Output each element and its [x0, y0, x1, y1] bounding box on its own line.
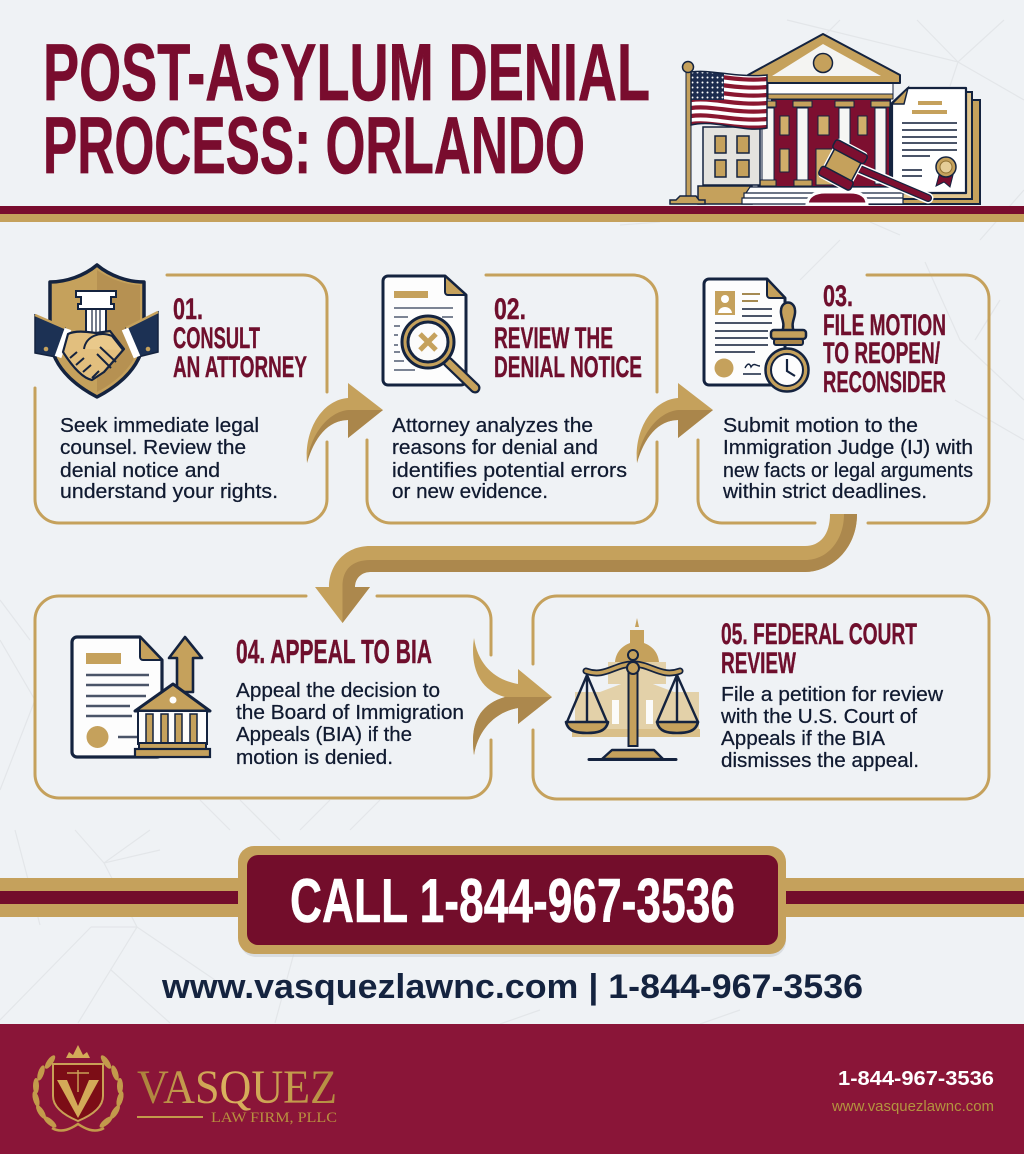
icon: shield and handshake: [35, 265, 158, 397]
icon: flag: [670, 62, 770, 204]
panel: step 05 federal court review: [533, 596, 989, 799]
heading: [721, 618, 917, 680]
heading: 01.: [173, 293, 203, 326]
title: POST-ASYLUM DENIAL: [43, 28, 650, 118]
text block: [60, 415, 278, 503]
text block: understand your rights.: [60, 481, 278, 503]
text block: Appeals (BIA) if the: [236, 724, 412, 746]
heading: 04. APPEAL TO BIA: [236, 634, 432, 671]
icon: scales of justice and capitol: [566, 618, 700, 760]
heading: 03.: [823, 280, 853, 313]
text block: dismisses the appeal.: [721, 750, 919, 772]
footer contact: [831, 1068, 994, 1115]
heading: CONSULT: [173, 322, 260, 355]
footer contact: www.vasquezlawnc.com: [831, 1099, 994, 1115]
text block: [392, 415, 627, 503]
text block: counsel. Review the: [60, 437, 246, 459]
icon: document, arrow and bank: [72, 637, 210, 757]
panel: step 04 appeal to BIA: [35, 596, 491, 798]
icon: document: [860, 88, 980, 204]
text block: [720, 684, 944, 772]
contact line: www.vasquezlawnc.com | 1-844-967-3536: [161, 968, 863, 1006]
text block: or new evidence.: [392, 481, 548, 503]
logo emblem: [31, 1045, 125, 1131]
logo wordmark: LAW FIRM, PLLC: [211, 1110, 337, 1126]
footer contact: 1-844-967-3536: [838, 1068, 994, 1090]
title: PROCESS: ORLANDO: [43, 101, 585, 191]
icon: courthouse, flag, document and gavel: [670, 34, 980, 204]
icon: document, stamp and clock: [704, 279, 808, 392]
panel: step 03 file motion to reopen or reconsider: [698, 275, 989, 523]
arrow: step 1 to step 2: [307, 383, 383, 463]
text block: motion is denied.: [236, 747, 393, 769]
text block: the Board of Immigration: [236, 702, 464, 724]
text block: with the U.S. Court of: [720, 706, 917, 728]
heading: TO REOPEN/: [823, 337, 940, 370]
arrow: step 3 to step 4: [315, 514, 857, 623]
text block: Appeal the decision to: [236, 680, 440, 702]
text block: reasons for denial and: [392, 437, 598, 459]
text block: Seek immediate legal: [60, 415, 259, 437]
heading: AN ATTORNEY: [173, 351, 307, 384]
text block: identifies potential errors: [392, 460, 627, 482]
text block: [722, 415, 973, 503]
icon: gavel: [807, 137, 928, 204]
text block: within strict deadlines.: [722, 481, 927, 503]
logo wordmark: VASQUEZ: [137, 1061, 337, 1114]
panel: step 02 review the denial notice: [367, 275, 657, 523]
text block: Submit motion to the: [723, 415, 918, 437]
header stripes: [0, 206, 1024, 222]
icon: courthouse: [698, 34, 903, 204]
heading: [173, 293, 307, 384]
footer panel: [0, 1024, 1024, 1154]
panel: step 01 consult an attorney: [35, 265, 327, 523]
text block: File a petition for review: [721, 684, 944, 706]
heading: 02.: [494, 293, 526, 326]
arrow: step 4 to step 5: [473, 638, 552, 755]
text block: Immigration Judge (IJ) with: [723, 437, 973, 459]
heading: [494, 293, 642, 384]
title: [43, 28, 650, 191]
heading: DENIAL NOTICE: [494, 351, 642, 384]
text block: denial notice and: [60, 460, 220, 482]
text block: Appeals if the BIA: [721, 728, 886, 750]
icon: document and magnifying glass: [383, 276, 475, 388]
call to action banner: CALL 1-844-967-3536: [290, 867, 735, 936]
heading: REVIEW THE: [494, 322, 613, 355]
arrow: step 2 to step 3: [637, 383, 713, 463]
heading: [823, 280, 946, 399]
heading: RECONSIDER: [823, 366, 946, 399]
heading: 05. FEDERAL COURT: [721, 618, 917, 651]
text block: [236, 680, 464, 769]
heading: FILE MOTION: [823, 309, 946, 342]
text block: new facts or legal arguments: [723, 460, 973, 482]
text block: Attorney analyzes the: [392, 415, 593, 437]
call to action banner: [0, 846, 1024, 957]
heading: REVIEW: [721, 647, 796, 680]
